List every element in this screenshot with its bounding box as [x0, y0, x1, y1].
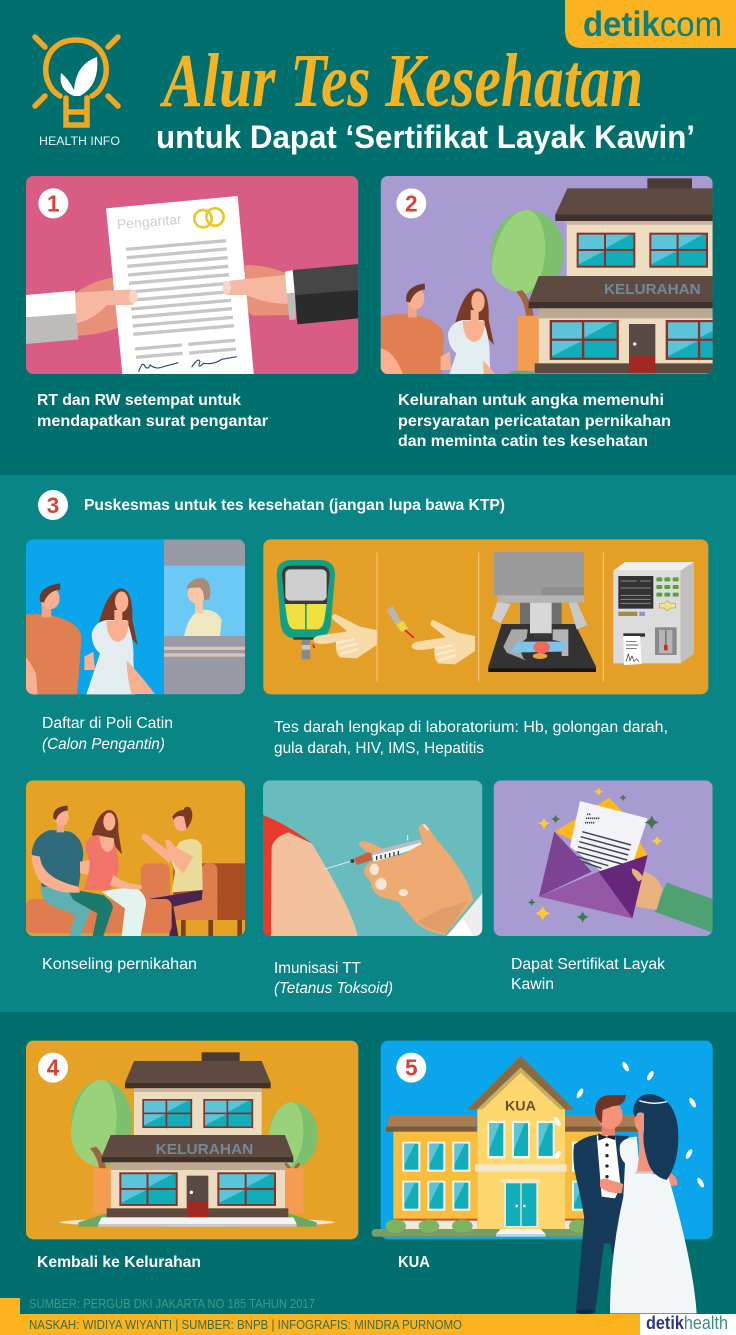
badge 2: 2 — [405, 190, 418, 216]
left hand and white sleeve — [26, 289, 138, 344]
ground — [60, 1213, 335, 1227]
icon: glucose meter — [277, 560, 377, 659]
syringe — [324, 835, 422, 869]
bride — [610, 1094, 697, 1313]
caption: certificate — [511, 956, 666, 993]
sleeve and hand — [636, 871, 712, 932]
caption 2 — [398, 392, 671, 450]
sofa — [141, 863, 245, 936]
panel: step 5 KUA — [372, 1041, 713, 1314]
paper document: Pengantar — [116, 211, 183, 232]
seated woman — [83, 810, 146, 936]
icon: blood analyzer — [613, 562, 694, 665]
KUA building: KUA — [505, 1098, 536, 1114]
arm with red sleeve — [263, 815, 358, 936]
caption: immunization: Imunisasi TT — [274, 960, 361, 977]
caption 1: mendapatkan surat pengantar — [37, 413, 268, 430]
doctor hand — [358, 824, 482, 936]
badge 2 — [396, 188, 426, 218]
icon: health info light bulb — [35, 37, 120, 148]
caption: certificate: Kawin — [511, 976, 554, 993]
panel: register at Poli Catin — [26, 539, 245, 694]
caption: blood test: gula darah, HIV, IMS, Hepatitis — [274, 740, 484, 757]
caption: blood test — [274, 719, 668, 757]
source line: SUMBER: PERGUB DKI JAKARTA NO 185 TAHUN 2017 — [29, 1296, 315, 1311]
house: KELURAHAN — [604, 282, 701, 298]
background: step 3 band — [0, 475, 736, 1012]
caption 1: RT dan RW setempat untuk — [37, 392, 241, 409]
badge 3: 3 — [47, 493, 59, 518]
badge 1 — [38, 188, 68, 218]
sparkles — [528, 787, 662, 923]
house — [93, 1052, 303, 1227]
panel: blood test lab — [263, 539, 708, 694]
background: top band — [0, 0, 736, 475]
tree — [492, 210, 564, 317]
badge 4 — [38, 1053, 68, 1083]
caption: Poli Catin: Daftar di Poli Catin — [42, 715, 173, 732]
couple — [380, 283, 496, 374]
subtitle: untuk Dapat ‘Sertifikat Layak Kawin’ — [156, 119, 695, 155]
KUA building — [372, 1056, 640, 1237]
panel: step 2 kelurahan — [380, 176, 713, 374]
groom — [573, 1095, 633, 1314]
caption: Poli Catin — [42, 715, 173, 753]
caption: certificate: Dapat Sertifikat Layak — [511, 956, 666, 973]
caption: Poli Catin: (Calon Pengantin) — [42, 736, 165, 753]
caption 1 — [37, 392, 268, 430]
caption: immunization: (Tetanus Toksoid) — [274, 980, 393, 997]
brand tab: detikcom — [565, 0, 736, 48]
icon: health info light bulb: HEALTH INFO — [39, 134, 120, 148]
badge 4: 4 — [47, 1055, 60, 1081]
caption: back to kelurahan: Kembali ke Kelurahan — [37, 1254, 201, 1271]
panel: step 1 letter — [26, 176, 358, 377]
panel: marriage counseling — [26, 780, 245, 936]
trees — [71, 1080, 318, 1168]
house: KELURAHAN — [156, 1142, 253, 1158]
couple — [83, 588, 155, 703]
paper document — [106, 196, 254, 377]
counselor — [142, 807, 203, 936]
envelope — [539, 798, 648, 918]
icon: microscope — [488, 552, 596, 672]
credits line: NASKAH: WIDIYA WIYANTI | SUMBER: BNPB | INFOGRAFIS: MINDRA PURNOMO — [29, 1317, 462, 1332]
badge 5 — [396, 1053, 426, 1083]
panel: step 4 back to kelurahan — [26, 1041, 358, 1239]
caption: blood test: Tes darah lengkap di laboratorium: Hb, golongan darah, — [274, 719, 668, 736]
badge 3 — [38, 490, 68, 520]
house — [508, 178, 713, 374]
caption 2: Kelurahan untuk angka memenuhi — [398, 392, 664, 409]
rice confetti — [553, 1061, 705, 1188]
seated man — [32, 806, 113, 936]
icon: blood tube and finger — [387, 606, 475, 664]
right hand and dark sleeve — [222, 264, 358, 324]
brand tab: detikcom: detikcom — [583, 5, 722, 44]
background: bottom band — [0, 1012, 736, 1315]
caption 2: persyaratan pericatatan pernikahan — [398, 413, 671, 430]
step 3 heading: Puskesmas untuk tes kesehatan (jangan lupa bawa KTP) — [84, 497, 505, 514]
receptionist — [184, 578, 222, 636]
panel: TT immunization — [263, 780, 482, 936]
caption 2: dan meminta catin tes kesehatan — [398, 433, 648, 450]
badge 5: 5 — [405, 1055, 418, 1081]
panel: certificate envelope — [494, 780, 713, 936]
caption: immunization — [274, 960, 393, 997]
caption: counseling: Konseling pernikahan — [42, 956, 197, 973]
caption KUA: KUA — [398, 1254, 430, 1271]
badge 1: 1 — [47, 190, 60, 216]
brand detikhealth: detikhealth — [646, 1313, 728, 1333]
footer — [0, 1296, 736, 1335]
